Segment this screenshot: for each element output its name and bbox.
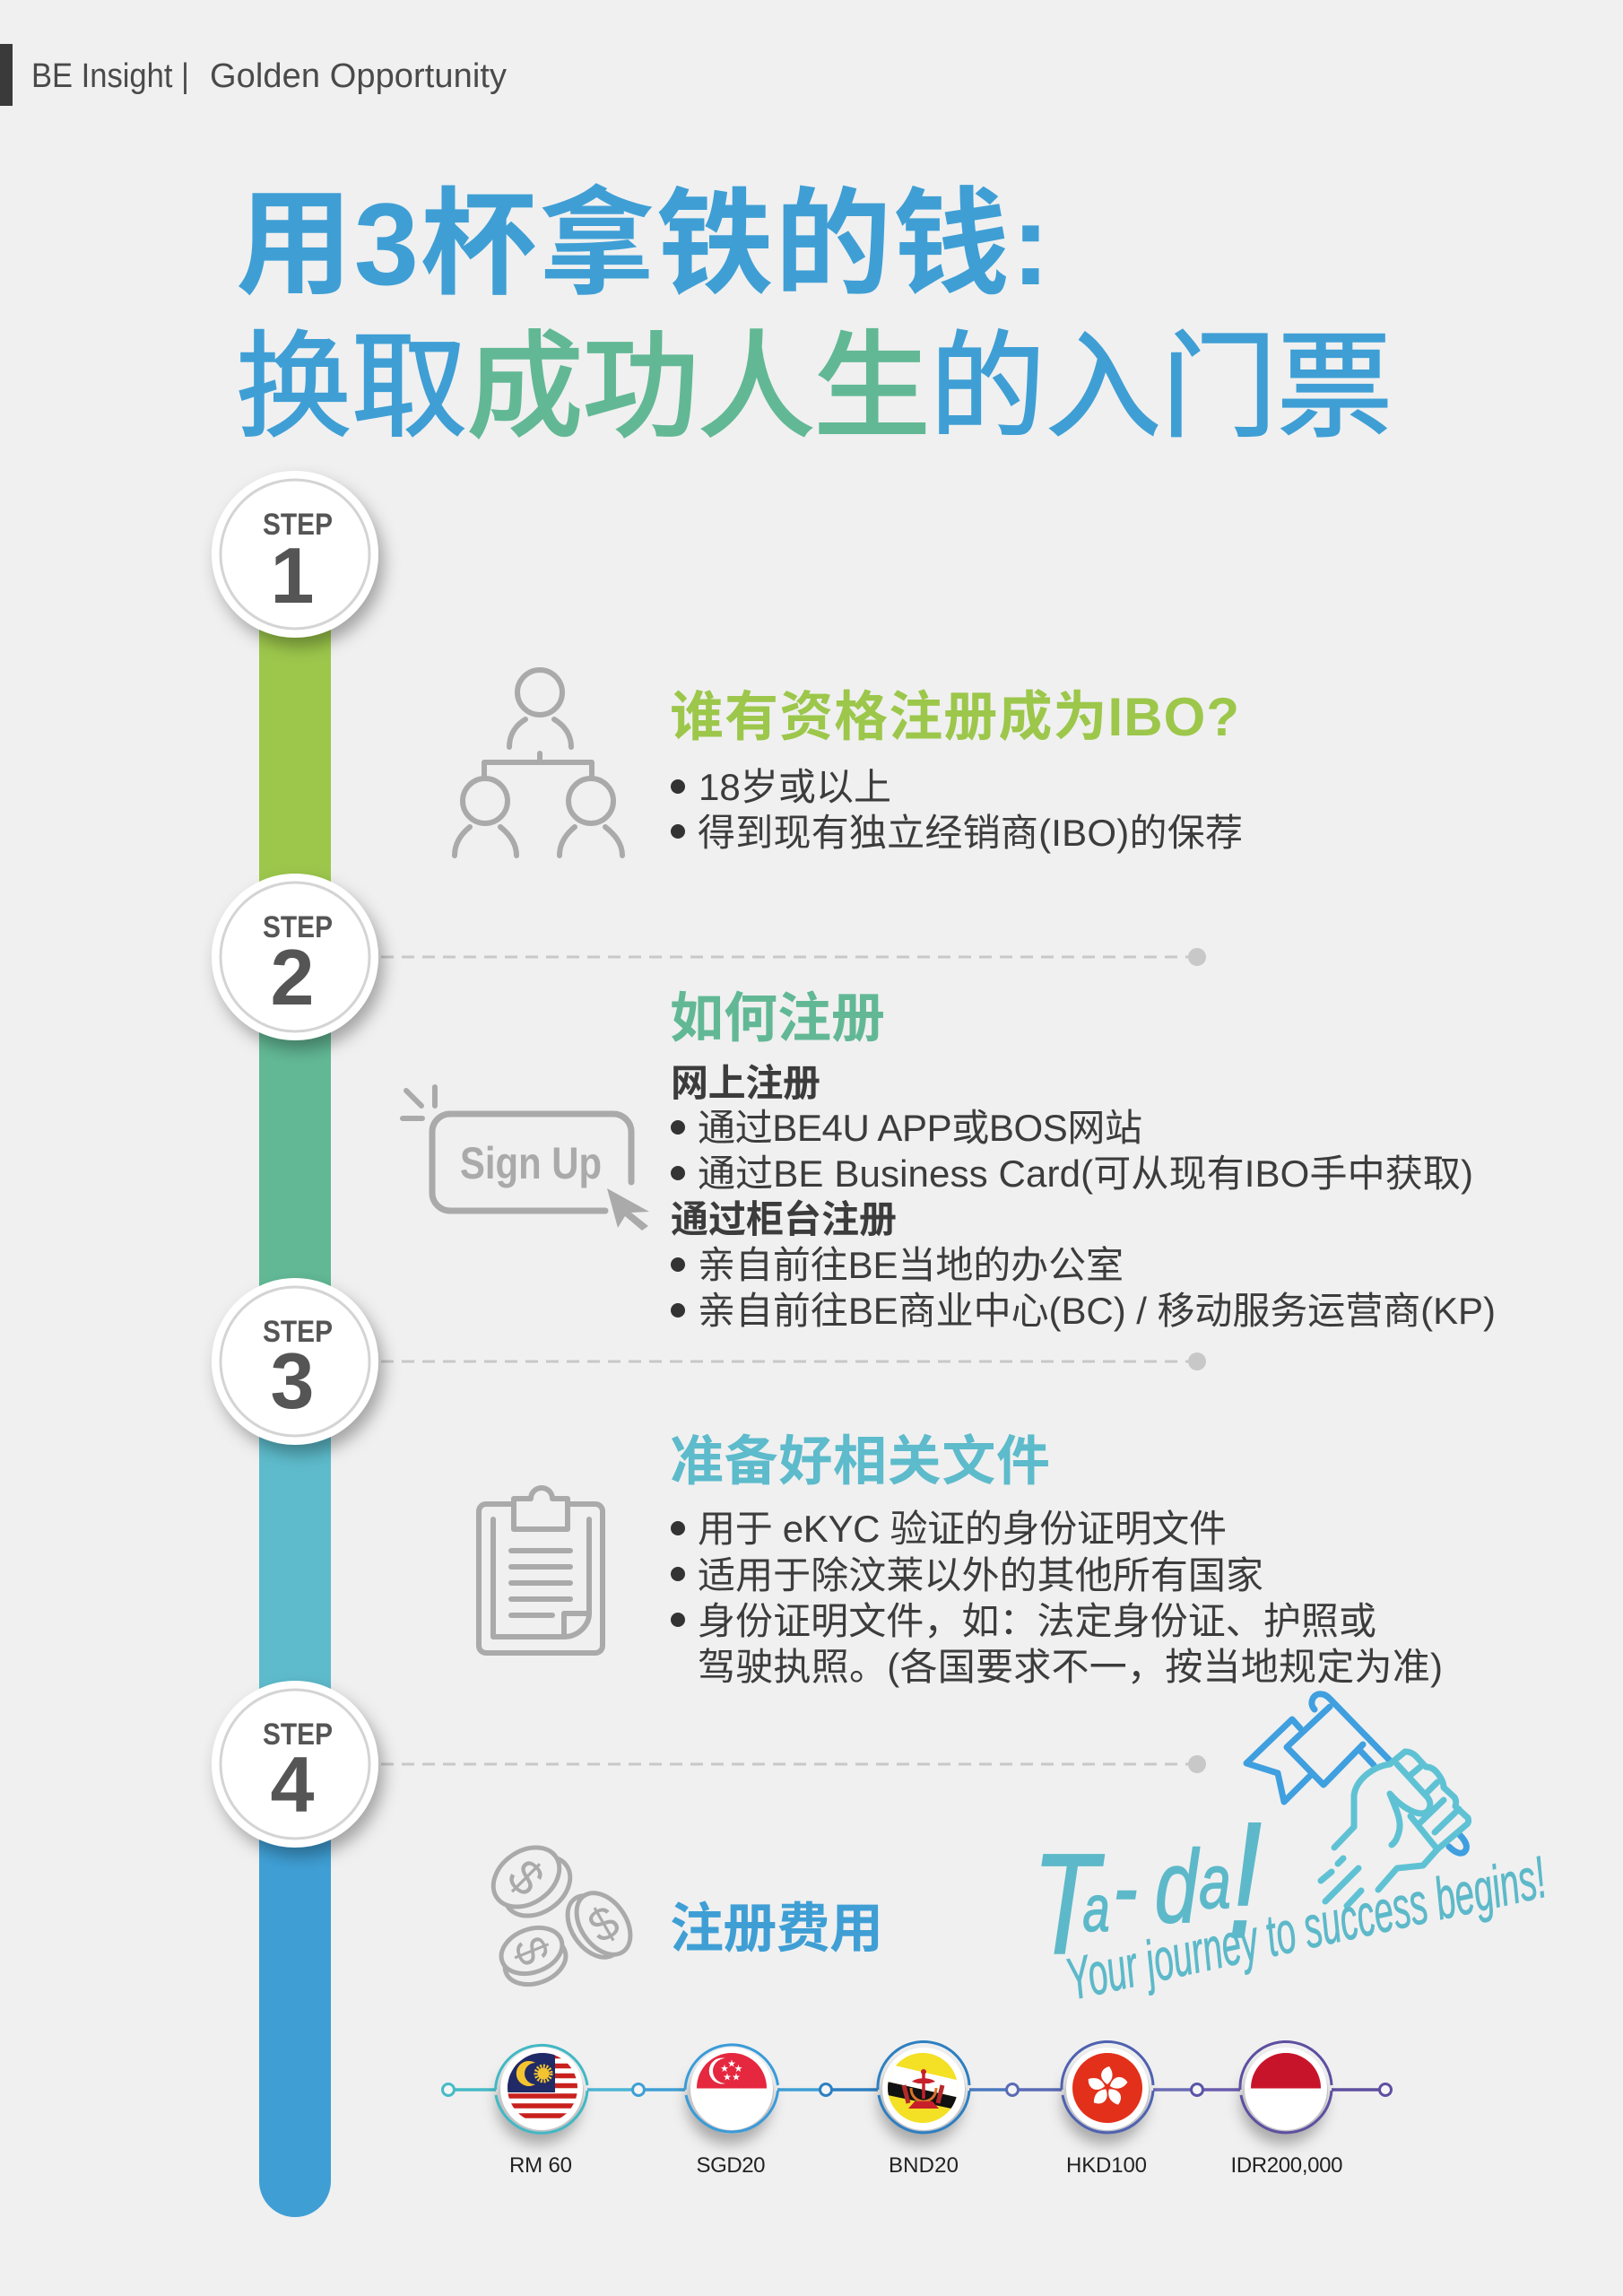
Hong Kong flag [1062, 2041, 1153, 2134]
icon: people hierarchy [455, 670, 622, 856]
coin 3: $ [504, 1930, 560, 1971]
connector lines [455, 2088, 1379, 2092]
step 4 badge [212, 1681, 378, 1848]
Ta-da lettering: T [1032, 1823, 1105, 1984]
dashed divider 4 [381, 1755, 1206, 1773]
document bullet 3: 驾驶执照。(各国要求不一，按当地规定为准) [698, 1646, 1443, 1688]
header text [31, 57, 507, 95]
section 3 heading: 准备好相关文件 [670, 1431, 1050, 1492]
header bar [0, 44, 13, 106]
fee labels [509, 2153, 1343, 2178]
fee: Singapore: SGD20 [696, 2153, 766, 2178]
online registration subheading: 网上注册 [671, 1062, 820, 1104]
step 1 badge: 1 [271, 531, 314, 620]
coin 2: $ [579, 1895, 629, 1953]
section 1 heading: 谁有资格注册成为IBO? [670, 687, 1239, 747]
timeline bar [259, 553, 331, 2217]
title [236, 178, 1393, 452]
connector nodes [443, 2084, 1392, 2095]
icon: sign up button [403, 1087, 649, 1231]
document bullet 3 [671, 1600, 1443, 1688]
Singapore flag [685, 2045, 778, 2134]
title line 2 start: 换取 [236, 323, 467, 452]
Malaysia flag [495, 2045, 587, 2134]
hand [1321, 1752, 1469, 1906]
fee timeline [443, 2041, 1392, 2178]
icon: sign up button: Sign Up [460, 1138, 602, 1188]
section 1 text [670, 687, 1243, 854]
header text: BE Insight | [31, 57, 189, 95]
step 4 badge: STEP [263, 1718, 333, 1752]
counter bullet 1: 亲自前往BE当地的办公室 [698, 1244, 1124, 1286]
document bullet 3: 身份证明文件，如：法定身份证、护照或 [698, 1600, 1376, 1642]
icon: coins [482, 1835, 641, 1993]
section 1 bullet 1: 18岁或以上 [699, 766, 891, 808]
Indonesia flag [1240, 2041, 1332, 2134]
coin 3 [495, 1919, 572, 1993]
flag [1246, 1694, 1466, 1853]
Singapore flag: ★ [727, 2059, 736, 2068]
Ta-da lettering: d [1155, 1829, 1201, 1944]
coin 2 [557, 1883, 641, 1967]
coin 1: $ [497, 1849, 554, 1907]
header text: Golden Opportunity [210, 57, 507, 95]
dashed divider 3 [381, 1352, 1206, 1370]
step 2 badge: STEP [263, 910, 333, 944]
section 2 text [670, 988, 1496, 1332]
online bullet 2: 通过BE Business Card(可从现有IBO手中获取) [698, 1152, 1473, 1195]
online bullet 1: 通过BE4U APP或BOS网站 [698, 1107, 1142, 1149]
section 1 bullet 2: 得到现有独立经销商(IBO)的保荐 [698, 812, 1243, 854]
step 3 badge: 3 [271, 1336, 314, 1425]
coin 1 [482, 1835, 581, 1928]
Ta-da lettering: a [1199, 1839, 1231, 1924]
section 4 heading: 注册费用 [670, 1899, 883, 1959]
step 2 badge [212, 874, 378, 1040]
section 2 heading: 如何注册 [670, 988, 885, 1048]
counter registration subheading: 通过柜台注册 [671, 1198, 897, 1240]
Brunei flag [878, 2041, 969, 2134]
dashed divider 2 [381, 948, 1206, 966]
Singapore flag: ★ [723, 2073, 732, 2082]
document bullet 2: 适用于除汶莱以外的其他所有国家 [698, 1554, 1263, 1596]
Singapore flag: ★ [734, 2065, 742, 2074]
Singapore flag: ★ [732, 2073, 741, 2082]
Ta-da lettering: a [1083, 1874, 1110, 1945]
step 1 badge: STEP [263, 508, 333, 542]
Ta-da lettering: ! [1228, 1787, 1262, 1973]
Ta-da lettering: - [1113, 1831, 1138, 1943]
title line 2 highlight: 成功人生 [467, 323, 930, 452]
step 3 badge: STEP [263, 1315, 333, 1349]
counter bullet 2: 亲自前往BE商业中心(BC) / 移动服务运营商(KP) [698, 1290, 1496, 1332]
step 3 badge [212, 1278, 378, 1445]
title line 1: 用3杯拿铁的钱: [236, 178, 1050, 309]
step 1 badge [212, 471, 378, 638]
fee: Brunei: BND20 [889, 2153, 959, 2178]
step 2 badge: 2 [271, 933, 314, 1022]
Singapore flag: ★ [720, 2065, 729, 2074]
document bullet 1: 用于 eKYC 验证的身份证明文件 [698, 1508, 1227, 1550]
fee: Hong Kong: HKD100 [1066, 2153, 1147, 2178]
title line 2 end: 的入门票 [930, 323, 1393, 452]
step 4 badge: 4 [271, 1740, 315, 1829]
fee: Malaysia: RM 60 [509, 2153, 572, 2178]
fee: Indonesia: IDR200,000 [1230, 2153, 1343, 2178]
section 3 text [670, 1431, 1443, 1688]
icon: hand holding flag [1246, 1694, 1469, 1906]
icon: clipboard [479, 1488, 603, 1653]
